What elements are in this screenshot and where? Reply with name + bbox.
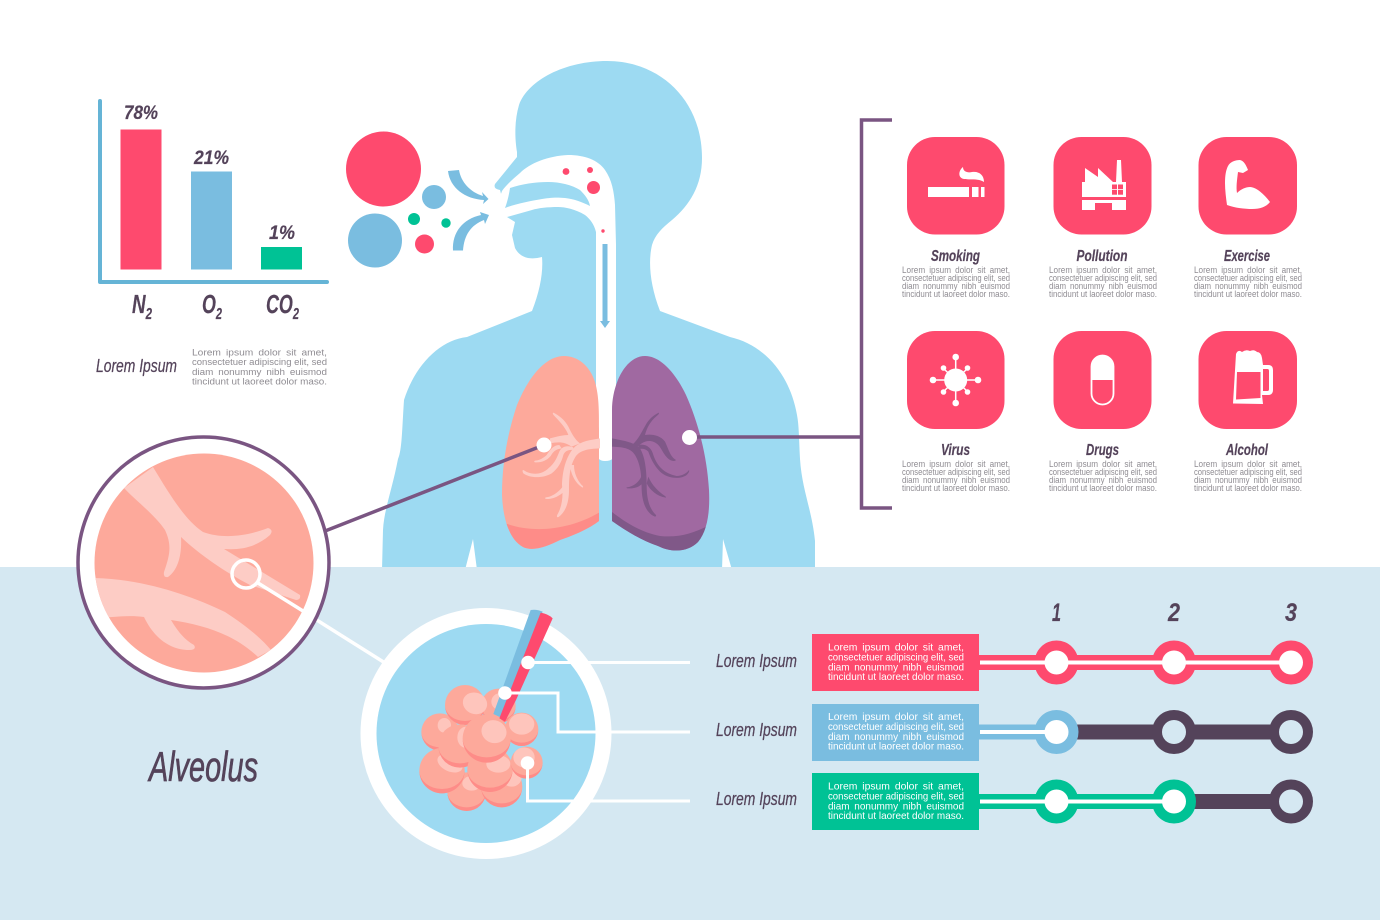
chart description: Lorem ipsum dolor sit amet, [192, 348, 327, 358]
row 2: blue progress: Lorem ipsum dolor sit amet, [828, 712, 964, 723]
bar: N2 78%: 78% [124, 102, 158, 124]
card: Exercise: Lorem ipsum dolor sit amet, [1194, 265, 1302, 275]
card: Pollution: diam nonummy nibh euismod [1049, 281, 1157, 291]
stage number 2: 2 [1167, 599, 1180, 627]
green track [979, 780, 1313, 824]
magnifier focus ring [232, 560, 260, 588]
card: Exercise: diam nonummy nibh euismod [1194, 281, 1302, 291]
alveolus marker dots [498, 656, 535, 770]
card: Exercise [1194, 137, 1302, 299]
card: Pollution: Lorem ipsum dolor sit amet, [1049, 265, 1157, 275]
bar: CO2 1% [261, 222, 302, 323]
icon: virus [930, 354, 981, 406]
row 3: green progress [716, 773, 1313, 830]
left lung [500, 356, 600, 560]
arrow: down the trachea [600, 244, 610, 328]
card: Exercise: Exercise [1224, 248, 1270, 265]
row 2: blue progress [716, 704, 1313, 761]
red track [979, 640, 1313, 684]
chart description: diam nonummy nibh euismod [192, 367, 327, 377]
card: Pollution [1049, 137, 1157, 299]
magnifier: lung tissue [78, 437, 329, 688]
card: Smoking [902, 137, 1010, 299]
row 3: green progress: consectetuer adipiscing elit, sed [828, 792, 964, 802]
card: Alcohol: Lorem ipsum dolor sit amet, [1194, 459, 1302, 469]
card: Drugs [1049, 331, 1157, 493]
card: Pollution: tincidunt ut laoreet dolor maso. [1049, 289, 1157, 299]
card: Smoking: Lorem ipsum dolor sit amet, [902, 265, 1010, 275]
bar: CO2 1%: CO [266, 289, 305, 319]
chart caption: Lorem Ipsum [96, 355, 177, 376]
bottom panel background [0, 567, 1380, 920]
card: Virus: Virus [941, 442, 970, 459]
card: Smoking: consectetuer adipiscing elit, sed [902, 273, 1010, 283]
row 1: red progress: tincidunt ut laoreet dolor maso. [828, 672, 964, 683]
icon: factory [1082, 160, 1126, 210]
card: Drugs: Drugs [1086, 442, 1119, 459]
connector: lung to magnifier [320, 445, 544, 533]
heading: Alveolus: Alveolus [147, 743, 258, 790]
card: Virus [902, 331, 1010, 493]
bar: CO2 1%: 1% [269, 222, 295, 244]
right lung base [612, 512, 706, 550]
bar: O2 21%: 2 [215, 306, 222, 323]
magnified bronchi [90, 467, 300, 657]
arrow: air in lower [453, 212, 489, 250]
row 1: red progress: diam nonummy nibh euismod [828, 662, 964, 674]
icon: cigarette [928, 167, 984, 197]
row 3: green progress: Lorem Ipsum [716, 788, 797, 809]
lung marker dots [536, 430, 697, 452]
alveoli cluster and vessel [419, 610, 553, 811]
bar: N2 78%: 2 [145, 306, 152, 323]
card: Alcohol: consectetuer adipiscing elit, sed [1194, 467, 1302, 477]
blood vessel [493, 610, 553, 722]
left lung base [506, 512, 599, 549]
card: Smoking: Smoking [931, 248, 980, 265]
bar: CO2 1%: 2 [292, 306, 299, 323]
row 3: green progress: diam nonummy nibh euismod [828, 802, 964, 812]
bar chart: air composition [100, 101, 327, 323]
airway particles [563, 167, 605, 233]
card: Alcohol: tincidunt ut laoreet dolor maso. [1194, 483, 1302, 493]
card: Exercise: tincidunt ut laoreet dolor maso. [1194, 289, 1302, 299]
card: Smoking: tincidunt ut laoreet dolor maso. [902, 289, 1010, 299]
chart axes [100, 101, 327, 282]
card: Virus: diam nonummy nibh euismod [902, 475, 1010, 485]
card: Drugs: diam nonummy nibh euismod [1049, 475, 1157, 485]
row 2: blue progress: tincidunt ut laoreet dolor maso. [828, 742, 964, 752]
bar: N2 78%: N [132, 289, 151, 319]
card: Pollution: consectetuer adipiscing elit, sed [1049, 273, 1157, 283]
card: Virus: consectetuer adipiscing elit, sed [902, 467, 1010, 477]
card: Virus: Lorem ipsum dolor sit amet, [902, 459, 1010, 469]
bar: O2 21%: 21% [193, 147, 229, 169]
right bronchi [612, 413, 689, 517]
body silhouette [382, 61, 815, 570]
icon: capsule [1091, 356, 1114, 404]
inhaled gas particles [346, 132, 451, 268]
arrow: air in upper [448, 170, 488, 204]
card: Smoking: diam nonummy nibh euismod [902, 281, 1010, 291]
blue track [979, 710, 1313, 754]
card: Virus: tincidunt ut laoreet dolor maso. [902, 483, 1010, 493]
stage number 1: 1 [1052, 599, 1061, 627]
row 3: green progress: Lorem ipsum dolor sit amet, [828, 782, 964, 792]
card: Exercise: consectetuer adipiscing elit, sed [1194, 273, 1302, 283]
card: Alcohol [1194, 331, 1302, 493]
card: Drugs: Lorem ipsum dolor sit amet, [1049, 459, 1157, 469]
card: Pollution: Pollution [1076, 248, 1128, 265]
palate [505, 182, 590, 208]
bar: N2 78% [120, 102, 162, 323]
airway [497, 155, 616, 461]
row 1: red progress: consectetuer adipiscing elit, sed [828, 652, 964, 664]
row 1: red progress: Lorem Ipsum [716, 650, 797, 671]
card: Alcohol: diam nonummy nibh euismod [1194, 475, 1302, 485]
row 2: blue progress: diam nonummy nibh euismod [828, 732, 964, 743]
row 3: green progress: tincidunt ut laoreet dolor maso. [828, 811, 964, 822]
connector: magnifier to alveolus [258, 583, 385, 663]
chart description: consectetuer adipiscing elit, sed [192, 357, 327, 367]
row 1: red progress: Lorem ipsum dolor sit amet, [828, 642, 964, 654]
chart description [192, 348, 327, 386]
row 1: red progress [716, 634, 1313, 691]
row 2: blue progress: Lorem Ipsum [716, 719, 797, 740]
left bronchi [522, 413, 600, 517]
bar: O2 21% [191, 147, 232, 323]
card: Alcohol: Alcohol [1225, 442, 1268, 459]
chart caption [96, 348, 327, 386]
bar: O2 21%: O [202, 289, 222, 319]
card: Drugs: consectetuer adipiscing elit, sed [1049, 467, 1157, 477]
row 2: blue progress: consectetuer adipiscing elit, sed [828, 722, 964, 733]
card: Drugs: tincidunt ut laoreet dolor maso. [1049, 483, 1157, 493]
icon: beer mug [1233, 350, 1273, 404]
chart description: tincidunt ut laoreet dolor maso. [192, 376, 327, 386]
icon: flexed arm [1225, 160, 1270, 209]
alveolus circle [360, 608, 612, 859]
connector: lung to risk factors bracket [690, 120, 892, 508]
alveolus leader lines [505, 662, 690, 801]
stage number 3: 3 [1285, 599, 1297, 627]
right lung [612, 356, 710, 550]
